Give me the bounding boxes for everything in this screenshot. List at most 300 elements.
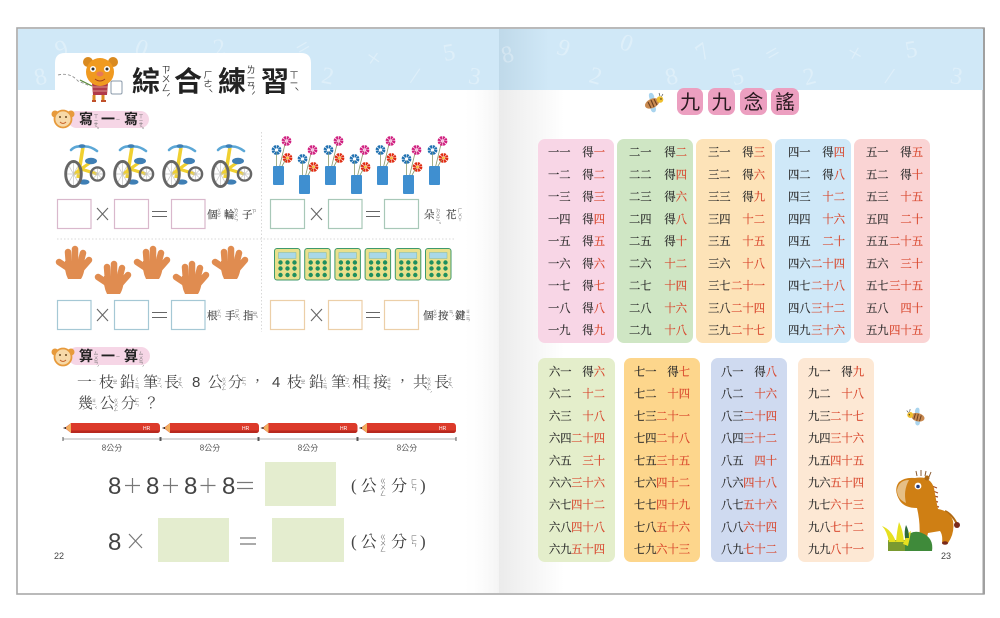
exercise: hands: ㄓˇ [252, 310, 258, 318]
header band with faint numbers: / [408, 63, 422, 90]
table panel: 九 times: 九四 [808, 430, 831, 446]
table panel: 一 times: 得三 [582, 188, 605, 204]
section tag: 寫一寫 [52, 110, 149, 130]
word problem text: 長 [164, 371, 179, 392]
table panel: 九 times: 十八 [841, 386, 864, 402]
word problem text: 枝 [287, 371, 302, 392]
table panel: 五 times: 十五 [900, 188, 923, 204]
word problem text [77, 371, 453, 413]
exercise: bicycles [58, 144, 257, 228]
table panel: 五 times: 五七 [866, 278, 889, 294]
table panel: 五 times: 五四 [866, 211, 889, 227]
table panel: 七 times [624, 358, 700, 562]
table panel: 一 times [538, 139, 614, 343]
table panel: 五 times: 四十五 [889, 322, 923, 338]
word problem text: 相 [352, 371, 367, 392]
word problem text: ㄍㄨㄥ [113, 398, 119, 412]
table panel: 七 times: 七五 [634, 452, 657, 468]
table panel: 五 times: 得五 [900, 144, 923, 160]
equation: multiplication: ㄍㄨㄥ [378, 534, 388, 552]
table panel: 六 times: 六二 [549, 386, 572, 402]
word problem text: ㄈㄣ [134, 398, 140, 408]
table panel: 四 times: 四二 [788, 166, 811, 182]
exercise: hands: 指 [243, 308, 254, 323]
table panel: 一 times: 一九 [548, 322, 571, 338]
equation: addition: 分 [391, 473, 407, 496]
header band with faint numbers: 2 [800, 63, 819, 91]
section tag: 寫一寫: 寫 [124, 111, 138, 127]
section tag: 寫一寫: 一 [101, 111, 115, 127]
word problem text: 筆 [331, 371, 346, 392]
equation: addition: 8 [184, 473, 197, 500]
pencils with 8 cm measures: 8公分 [298, 444, 318, 452]
equation: addition: ) [420, 476, 426, 495]
exercise: hands: 手 [225, 308, 236, 323]
table panel: 一 times: 一六 [548, 255, 571, 271]
word problem text: ㄍㄨㄥˋ [426, 377, 432, 394]
word problem text: 分 [121, 392, 136, 413]
table panel: 八 times: 二十四 [743, 408, 777, 424]
word problem text: 筆 [143, 371, 158, 392]
equation: multiplication: 公 [361, 529, 377, 552]
exercise: hands [58, 249, 258, 330]
table panel: 六 times: 四十八 [571, 519, 605, 535]
table panel: 五 times: 五九 [866, 322, 889, 338]
icon: small bee [906, 407, 927, 427]
table panel: 九 times: 九六 [808, 474, 831, 490]
title tab: 綜合練習: ㄗㄨㄥˋ [160, 65, 172, 97]
calculator illustrations [274, 248, 451, 280]
grass [882, 522, 932, 551]
word problem text: ㄐㄧㄝ [386, 377, 392, 390]
table panel: 四 times: 十六 [822, 211, 846, 227]
word problem text: ㄈㄣ [241, 377, 247, 387]
pencil 4: HR [439, 426, 447, 432]
word problem text: 共 [413, 371, 428, 392]
table panel: 一 times: 一四 [548, 211, 571, 227]
table panel: 一 times: 得八 [582, 300, 605, 316]
table panel: 五 times: 四十 [900, 300, 923, 316]
table panel: 五 times: 二十五 [889, 233, 923, 249]
header band with faint numbers: × [845, 40, 865, 69]
table panel: 四 times: 二十八 [811, 278, 845, 294]
hand illustrations [59, 249, 245, 294]
table panel: 八 times: 三十二 [743, 430, 777, 446]
table panel: 二 times: 十八 [664, 322, 687, 338]
word problem text: ㄐㄧˇ [91, 398, 97, 409]
pencils with 8 cm measures [63, 423, 456, 452]
table panel: 四 times: 四三 [788, 188, 811, 204]
table panel: 四 times: 四五 [788, 233, 811, 249]
section tag: 算一算: ㄙㄨㄢˋ [93, 351, 99, 368]
equation: addition: ㄈㄣ [410, 479, 418, 492]
table panel: 二 times: 二五 [629, 233, 652, 249]
table panel: 一 times: 一五 [548, 233, 571, 249]
table panel: 九 times: 三十六 [830, 430, 865, 446]
section tag: 算一算: ㄙㄨㄢˋ [138, 351, 144, 368]
equation: multiplication: 分 [391, 529, 407, 552]
exercise: bicycles: 子 [242, 207, 253, 222]
table panel: 八 times: 八七 [721, 497, 744, 513]
header band with faint numbers: 2 [320, 63, 336, 90]
exercise: calculators [270, 248, 471, 330]
word problem text: 公 [208, 371, 223, 392]
exercise: bicycles: ㄍㄜ [216, 208, 222, 217]
table panel: 二 times: 十二 [664, 255, 687, 271]
table panel: 九 times: 九一 [808, 364, 831, 380]
equation: addition: 8 [108, 473, 121, 500]
table panel: 七 times: 六十三 [656, 541, 690, 557]
table panel: 七 times: 二十八 [656, 430, 690, 446]
table panel: 五 times [854, 139, 930, 343]
word problem text: 8 [192, 374, 200, 391]
exercise: calculators: 鍵 [455, 308, 466, 323]
exercise: bicycles: 輪 [224, 207, 235, 222]
exercise: flowers: 花 [446, 207, 457, 222]
exercise: calculators: ㄐㄧㄢ [465, 309, 471, 323]
table panel: 六 times: 三十六 [571, 474, 606, 490]
equation: addition: ㄍㄨㄥ [378, 478, 388, 496]
pencil 1 [63, 423, 160, 433]
header band with faint numbers: 3 [948, 63, 964, 91]
table panel: 三 times: 得三 [742, 144, 765, 160]
flower vase illustrations [273, 138, 447, 194]
word problem text: 幾 [78, 392, 93, 413]
exercise: flowers: 朵 [424, 207, 435, 222]
header band with faint numbers: 3 [466, 63, 483, 91]
table panel: 八 times: 八九 [721, 541, 744, 557]
equation: addition: 8 [222, 473, 235, 500]
table panel: 三 times [696, 139, 772, 343]
table panel: 四 times: 四六 [788, 255, 811, 271]
section tag: 寫一寫: 寫 [79, 111, 93, 127]
equation: multiplication: ㄈㄣ [410, 535, 418, 548]
exercise: flowers [270, 138, 463, 228]
dotted dividers [57, 132, 456, 332]
title tab: 綜合練習: ㄒㄧˊ [288, 70, 300, 92]
word problem text: 4 [272, 374, 280, 391]
table panel: 八 times: 八四 [721, 430, 744, 446]
table panel: 七 times: 七六 [634, 474, 657, 490]
header band with faint numbers: × [365, 45, 383, 73]
table panel: 七 times: 四十九 [656, 497, 690, 513]
table panel: 七 times: 四十二 [656, 474, 690, 490]
table panel: 八 times: 八六 [721, 474, 744, 490]
table panel: 六 times: 六九 [549, 541, 572, 557]
table panel: 四 times [775, 139, 851, 343]
table panel: 七 times: 七二 [634, 386, 657, 402]
table panel: 六 times: 四十二 [571, 497, 605, 513]
word problem text: ㄧ [91, 379, 97, 383]
header band with faint numbers: 9 [52, 35, 72, 63]
table panel: 三 times: 三六 [708, 255, 731, 271]
table panel: 九 times: 五十四 [830, 474, 864, 490]
table panel: 九 times: 八十一 [830, 541, 864, 557]
exercise: calculators: 個 [423, 308, 434, 323]
table panel: 七 times: 七一 [634, 364, 657, 380]
word problem text: ㄓ [112, 378, 118, 384]
equation: addition [108, 462, 426, 506]
header band with faint numbers: 0 [616, 29, 636, 58]
title tab: 綜合練習 [55, 53, 311, 101]
table panel: 九 times: 七十二 [830, 519, 864, 535]
section tag: 算一算: 一 [101, 348, 115, 364]
table panel: 二 times: 十六 [664, 300, 688, 316]
exercise: hands: ㄕㄡˇ [234, 309, 240, 321]
table panel: 六 times [538, 358, 615, 562]
table panel: 八 times: 八五 [721, 452, 744, 468]
table panel: 四 times: 四七 [788, 278, 811, 294]
equation: multiplication: 8 [108, 529, 121, 556]
table panel: 二 times: 得十 [664, 233, 687, 249]
table panel: 二 times: 二二 [629, 166, 652, 182]
icon: bee [643, 93, 663, 112]
pencils with 8 cm measures: 8公分 [397, 444, 417, 452]
table panel: 二 times: 二九 [629, 322, 652, 338]
table panel: 五 times: 三十五 [889, 278, 923, 294]
header band with faint numbers: 2 [211, 34, 228, 62]
table panel: 一 times: 得七 [582, 278, 605, 294]
table panel: 八 times: 八一 [721, 364, 744, 380]
table panel: 二 times: 得二 [664, 144, 687, 160]
table panel: 八 times: 十六 [754, 386, 778, 402]
icon: monkey face [52, 110, 74, 128]
section tag: 寫一寫: ㄒㄧㄝˇ [93, 114, 99, 130]
table panel: 四 times: 四八 [788, 300, 811, 316]
table panel: 二 times: 二七 [629, 278, 652, 294]
title tab: 綜合練習: ㄏㄜˊ [202, 70, 214, 93]
word problem text: ？ [144, 392, 159, 413]
table panel: 八 times: 五十六 [743, 497, 778, 513]
table panel: 二 times: 二六 [629, 255, 652, 271]
heading: 九九念謠: 九 [680, 91, 700, 114]
pencil 4 [359, 423, 456, 433]
heading: 九九念謠: 念 [744, 91, 764, 114]
word problem text: ， [395, 371, 410, 392]
table panel: 二 times: 得四 [664, 166, 687, 182]
pencils with 8 cm measures: 8公分 [102, 444, 122, 452]
header band with faint numbers: 5 [903, 36, 920, 64]
table panel: 五 times: 五六 [866, 255, 889, 271]
table panel: 四 times: 二十 [822, 233, 845, 249]
table panel: 九 times: 二十七 [830, 408, 864, 424]
table panel: 八 times: 八八 [721, 519, 744, 535]
word problem text: 接 [373, 371, 388, 392]
pencil 3: HR [340, 426, 348, 432]
exercise: hands: 根 [207, 308, 218, 323]
table panel: 二 times: 十四 [664, 278, 687, 294]
exercise: flowers: ㄏㄨㄚ [457, 208, 463, 222]
table panel: 九 times: 九二 [808, 386, 831, 402]
page number 23: 23 [941, 551, 951, 561]
page number 22: 22 [54, 551, 64, 561]
table panel: 三 times: 三三 [708, 188, 731, 204]
icon: pig mascot [58, 57, 122, 101]
header band with faint numbers: 5 [441, 39, 457, 67]
table panel: 八 times: 四十八 [743, 474, 777, 490]
table panel: 一 times: 一八 [548, 300, 571, 316]
table panel: 八 times [711, 358, 787, 562]
table panel: 九 times: 九三 [808, 408, 831, 424]
table panel: 七 times: 三十五 [656, 452, 690, 468]
table panel: 八 times: 八三 [721, 408, 744, 424]
word problem text: ㄔㄤˊ [177, 377, 183, 389]
table panel: 七 times: 五十六 [656, 519, 691, 535]
answer boxes [270, 200, 418, 228]
title tab: 綜合練習: ㄌㄧㄢˋ [244, 65, 258, 96]
header band with faint numbers: / [883, 63, 896, 90]
section tag: 算一算: 算 [79, 348, 93, 364]
header band with faint numbers: 0 [131, 34, 151, 63]
section tag: 算一算 [52, 347, 150, 368]
table panel: 一 times: 得四 [582, 211, 605, 227]
table panel: 三 times: 三七 [708, 278, 731, 294]
equation: multiplication: ) [420, 532, 426, 551]
table panel: 一 times: 得一 [582, 144, 605, 160]
header band with faint numbers: 8 [498, 41, 517, 69]
table panel: 四 times: 得八 [822, 166, 845, 182]
table panel: 六 times: 六八 [549, 519, 572, 535]
word problem text: ㄑㄧㄢ [322, 377, 328, 391]
table panel: 五 times: 三十 [900, 255, 923, 271]
table panel: 五 times: 二十 [900, 211, 923, 227]
table panel: 三 times: 三九 [708, 322, 731, 338]
word problem text: 分 [228, 371, 243, 392]
word problem text: ㄓ [300, 378, 306, 384]
table panel: 九 times: 九七 [808, 497, 831, 513]
table panel: 四 times: 三十二 [811, 300, 845, 316]
equation: addition: 8 [146, 473, 159, 500]
answer boxes [58, 200, 205, 228]
table panel: 六 times: 六四 [549, 430, 572, 446]
equation: addition: 公 [361, 473, 377, 496]
table panel: 七 times: 七八 [634, 519, 657, 535]
table panel: 九 times [798, 358, 874, 562]
answer boxes [58, 300, 205, 330]
heading: 九九念謠: 九 [712, 91, 732, 114]
table panel: 四 times: 四四 [788, 211, 811, 227]
table panel: 二 times: 二三 [629, 188, 652, 204]
table panel: 四 times: 二十四 [811, 255, 845, 271]
word problem text: 鉛 [120, 371, 135, 392]
icon: monkey face [52, 348, 74, 366]
table panel: 一 times: 得五 [582, 233, 605, 249]
table panel: 七 times: 二十一 [656, 408, 690, 424]
table panel: 九 times: 九八 [808, 519, 831, 535]
table panel: 二 times [617, 139, 693, 343]
table panel: 九 times: 四十五 [830, 452, 864, 468]
word problem text: ㄅㄧˇ [156, 376, 162, 388]
table panel: 二 times: 得八 [664, 211, 687, 227]
table panel: 五 times: 得十 [900, 166, 923, 182]
section tag: 寫一寫: ㄧ [115, 118, 121, 122]
table panel: 一 times: 一一 [548, 144, 571, 160]
table panel: 一 times: 得六 [582, 255, 606, 271]
table panel: 四 times: 十二 [822, 188, 845, 204]
table panel: 六 times: 六七 [549, 497, 572, 513]
table panel: 六 times: 六三 [549, 408, 572, 424]
table panel: 八 times: 七十二 [743, 541, 777, 557]
word problem text: ㄑㄧㄢ [134, 377, 140, 391]
header band with faint numbers: 9 [553, 34, 573, 63]
exercise: bicycles: ㄗ [251, 209, 257, 215]
table panel: 五 times: 五五 [866, 233, 889, 249]
table panel: 七 times: 七四 [634, 430, 657, 446]
table panel: 三 times: 二十七 [731, 322, 765, 338]
pencil 2: HR [242, 426, 250, 432]
measure lines [63, 437, 456, 441]
table panel: 五 times: 五三 [866, 188, 889, 204]
header band with faint numbers: 2 [586, 63, 605, 91]
table panel: 三 times: 得六 [742, 166, 766, 182]
table panel: 六 times: 六一 [549, 364, 572, 380]
word problem text: ㄅㄧˇ [344, 376, 350, 388]
table panel: 三 times: 二十一 [731, 278, 765, 294]
section tag: 寫一寫: ㄒㄧㄝˇ [138, 114, 144, 130]
table panel: 七 times: 十四 [667, 386, 690, 402]
header band with faint numbers: 5 [728, 63, 747, 91]
table panel: 一 times: 一二 [548, 166, 571, 182]
table panel: 一 times: 得二 [582, 166, 605, 182]
table panel: 八 times: 六十四 [743, 519, 777, 535]
exercise: bicycles: 個 [207, 207, 218, 222]
section tag: 算一算: 算 [124, 348, 138, 364]
table panel: 六 times: 五十四 [571, 541, 605, 557]
table panel: 六 times: 六六 [549, 474, 572, 490]
header band with faint numbers: 8 [662, 63, 681, 91]
header band with faint numbers: = [291, 33, 316, 63]
word problem text: 鉛 [309, 371, 324, 392]
table panel: 四 times: 四九 [788, 322, 811, 338]
pencil 2 [162, 423, 259, 433]
header band with faint numbers: 8 [31, 63, 50, 92]
table panel: 三 times: 十五 [742, 233, 765, 249]
table panel: 三 times: 三八 [708, 300, 731, 316]
table panel: 三 times: 三四 [708, 211, 731, 227]
exercise: hands: ㄍㄣ [216, 309, 222, 319]
table panel: 六 times: 得六 [582, 364, 606, 380]
pencil 1: HR [143, 426, 151, 432]
table panel: 四 times: 三十六 [811, 322, 846, 338]
table panel: 六 times: 十八 [582, 408, 605, 424]
equation: addition: ( [351, 476, 357, 495]
table panel: 三 times: 十八 [742, 255, 765, 271]
title tab: 綜合練習: 習 [261, 66, 289, 97]
pencil 3 [260, 423, 358, 433]
table panel: 二 times: 二四 [629, 211, 652, 227]
table panel: 八 times: 八二 [721, 386, 744, 402]
title tab: 綜合練習: 合 [174, 66, 202, 97]
heading: 九九念謠 [643, 88, 799, 115]
table panel: 六 times: 二十四 [571, 430, 605, 446]
table panel: 一 times: 得九 [582, 322, 605, 338]
equation: multiplication: ( [351, 532, 357, 551]
table panel: 二 times: 二八 [629, 300, 652, 316]
table panel: 九 times: 六十三 [830, 497, 864, 513]
header band with faint numbers [18, 29, 983, 92]
table panel: 七 times: 七七 [634, 497, 657, 513]
exercise: bicycles: ㄌㄨㄣ [233, 207, 239, 223]
table panel: 九 times: 九九 [808, 541, 831, 557]
section tag: 算一算: ㄧ [115, 355, 121, 359]
word problem text: 枝 [99, 371, 114, 392]
table panel: 一 times: 一七 [548, 278, 571, 294]
table panel: 六 times: 三十 [582, 452, 605, 468]
answer boxes [270, 300, 418, 330]
table panel: 七 times: 七九 [634, 541, 657, 557]
exercise: calculators: ㄢˋ [448, 310, 454, 318]
table panel: 七 times: 得七 [667, 364, 690, 380]
